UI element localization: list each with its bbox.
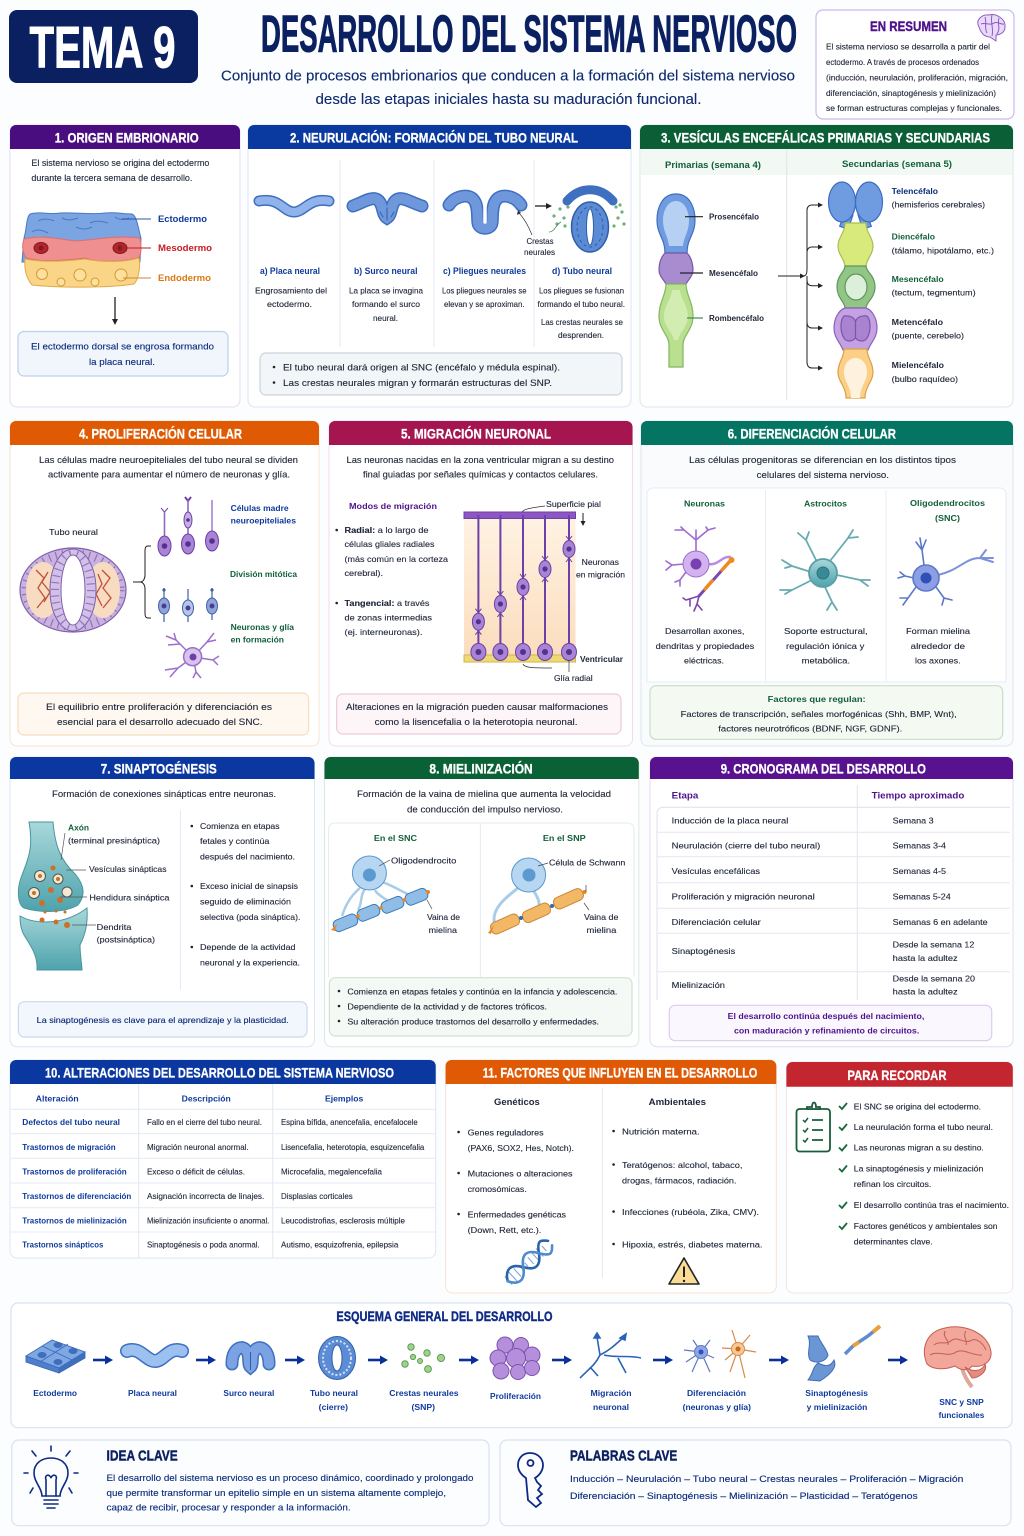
- panel 1: origen embrionario: [10, 125, 240, 407]
- panel 6: diferenciación celular: Las células progenitoras se diferencian en los distintos tipos: [689, 455, 957, 465]
- panel 10: alteraciones: Migración neuronal anormal.: [147, 1143, 249, 1152]
- callout: placa neural: la placa neural.: [89, 357, 155, 367]
- callout: factores que regulan: Factores que regulan:: [768, 695, 866, 704]
- panel 11: factores: Hipoxia, estrés, diabetes materna.: [622, 1240, 762, 1250]
- panel 5: migración neuronal: Radial: a lo largo de: [344, 526, 429, 535]
- diagram: placa neural: [259, 200, 329, 212]
- callout: factores que regulan: Factores de transcripción, señales morfogénicas (Shh, BMP, Wnt),: [681, 710, 957, 719]
- panel 2: neurulación: Las crestas neurales se: [541, 318, 624, 327]
- panel 6: diferenciación celular: celulares del sistema nervioso.: [757, 470, 889, 480]
- icon: bombilla: [24, 1446, 78, 1508]
- panel 4: proliferación celular: 4. PROLIFERACIÓN CELULAR: [79, 424, 242, 442]
- panel: esquema general: (SNP): [412, 1403, 435, 1412]
- panel 8: mielinización: mielina: [429, 926, 458, 935]
- icon: cerebro: [924, 1327, 991, 1387]
- panel 11: factores: [446, 1060, 776, 1293]
- panel 8: mielinización: Célula de Schwann: [549, 858, 625, 868]
- panel: en resumen: [816, 10, 1014, 119]
- panel 11: factores: Genéticos: [494, 1097, 540, 1107]
- icon: tubo neural: [318, 1336, 356, 1380]
- panel 9: cronograma: 9. CRONOGRAMA DEL DESARROLLO: [721, 760, 926, 776]
- subtitle: Conjunto de procesos embrionarios que conducen a la formación del sistema nervioso: [221, 68, 795, 84]
- panel 4: proliferación celular: Tubo neural: [49, 528, 98, 537]
- diagram: tubo neural: [549, 190, 626, 252]
- panel 11: factores: Infecciones (rubéola, Zika, CMV).: [622, 1208, 759, 1217]
- panel 10: alteraciones: Defectos del tubo neural: [22, 1118, 120, 1127]
- panel: esquema general: Diferenciación: [687, 1389, 746, 1398]
- panel: idea clave: capaz de recibir, procesar y responder a la información.: [106, 1502, 351, 1512]
- panel: para recordar: Las neuronas migran a su destino.: [854, 1144, 984, 1152]
- table: cronograma: hasta la adultez: [893, 988, 958, 996]
- panel 3: vesículas encefálicas: Secundarias (semana 5): [842, 159, 952, 169]
- panel 7: sinaptogénesis: Comienza en etapas: [200, 822, 280, 831]
- icon: brain outline: [978, 15, 1005, 41]
- panel 6: diferenciación celular: Soporte estructural,: [784, 627, 868, 636]
- panel: esquema general: [11, 1303, 1012, 1428]
- panel 3: vesículas encefálicas: [640, 125, 1013, 407]
- diagram: oligodendrocito: [331, 856, 432, 933]
- panel 5: migración neuronal: Neuronas: [582, 558, 619, 567]
- panel 11: factores: drogas, fármacos, radiación.: [622, 1176, 736, 1186]
- panel: esquema general: Surco neural: [223, 1389, 274, 1398]
- panel: esquema general: (cierre): [319, 1403, 348, 1412]
- panel: idea clave: El desarrollo del sistema nervioso es un proceso dinámico, coordinado y prolongado: [106, 1473, 474, 1483]
- panel: en resumen: se forman estructuras complejas y funcionales.: [826, 104, 1002, 113]
- panel 6: diferenciación celular: Forman mielina: [906, 627, 971, 636]
- panel 8: mielinización: En el SNC: [374, 834, 417, 843]
- diagram: sinapsis: [18, 822, 96, 970]
- icon: crestas neurales: [402, 1344, 445, 1372]
- panel 8: mielinización: Vaina de: [584, 913, 619, 922]
- panel: esquema general: Placa neural: [128, 1389, 177, 1398]
- callout: desarrollo continúa: con maduración y refinamiento de circuitos.: [734, 1026, 919, 1036]
- callout: equilibrio: [18, 693, 309, 735]
- panel 2: neurulación: ectodermo.: [267, 300, 312, 309]
- panel 6: diferenciación celular: 6. DIFERENCIACIÓN CELULAR: [728, 424, 896, 442]
- panel: para recordar: El SNC se origina del ectodermo.: [854, 1102, 981, 1112]
- panel: palabras clave: [500, 1440, 1011, 1526]
- panel 2: neurulación: Engrosamiento del: [255, 286, 327, 296]
- panel: para recordar: [786, 1062, 1013, 1293]
- banner: TEMA 9: [9, 10, 198, 83]
- panel 2: neurulación: Los pliegues neurales se: [442, 286, 527, 296]
- panel 8: mielinización: Oligodendrocito: [391, 856, 457, 866]
- panel: para recordar: Factores genéticos y ambientales son: [854, 1222, 998, 1231]
- icon: placa neural: [127, 1350, 182, 1361]
- panel 5: migración neuronal: (más común en la corteza: [344, 555, 449, 564]
- table: cronograma: Semanas 5-24: [893, 892, 951, 902]
- banner: TEMA 9: TEMA 9: [30, 16, 176, 80]
- subtitle: desde las etapas iniciales hasta su maduración funcional.: [316, 92, 702, 108]
- panel 1: origen embrionario: Mesodermo: [158, 243, 213, 253]
- panel 11: factores: 11. FACTORES QUE INFLUYEN EN EL DESARROLLO: [483, 1064, 757, 1080]
- panel 2: neurulación: formando el tubo neural.: [538, 300, 625, 309]
- panel: idea clave: IDEA CLAVE: [106, 1448, 178, 1464]
- panel 10: alteraciones: Leucodistrofias, esclerosis múltiple: [281, 1216, 406, 1226]
- table: cronograma: Desde la semana 12: [893, 940, 975, 950]
- diagram: célula de Schwann: [488, 858, 589, 936]
- panel 3: vesículas encefálicas: (tálamo, hipotálamo, etc.): [892, 246, 994, 256]
- panel 9: cronograma: Tiempo aproximado: [872, 790, 965, 800]
- panel: palabras clave: PALABRAS CLAVE: [570, 1448, 677, 1464]
- panel 6: diferenciación celular: (SNC): [935, 514, 960, 523]
- panel 4: proliferación celular: División mitótica: [230, 570, 298, 579]
- callout: aprendizaje: [18, 1002, 307, 1037]
- panel: esquema general: SNC y SNP: [939, 1398, 984, 1407]
- panel 10: alteraciones: Trastornos de proliferación: [22, 1168, 127, 1176]
- panel: para recordar: PARA RECORDAR: [847, 1067, 946, 1083]
- panel: esquema general: Proliferación: [490, 1392, 541, 1401]
- panel 10: alteraciones: Sinaptogénesis o poda anormal.: [147, 1240, 260, 1250]
- table: cronograma: hasta la adultez: [893, 954, 958, 963]
- panel 6: diferenciación celular: Astrocitos: [804, 500, 848, 508]
- arrow: to tube: [535, 203, 552, 209]
- panel: idea clave: [12, 1440, 489, 1526]
- panel 10: alteraciones: Exceso o déficit de células.: [147, 1168, 245, 1176]
- icon: diferenciación: [684, 1330, 756, 1378]
- panel 2: neurulación: elevan y se aproximan.: [444, 300, 524, 309]
- table: cronograma: Mielinización: [672, 981, 725, 990]
- table: cronograma: Diferenciación celular: [672, 918, 761, 927]
- panel 2: neurulación: d) Tubo neural: [552, 266, 612, 276]
- panel 6: diferenciación celular: [641, 421, 1013, 746]
- icon: división mitótica: [158, 588, 218, 622]
- panel 11: factores: (PAX6, SOX2, Hes, Notch).: [468, 1144, 574, 1153]
- panel 5: migración neuronal: cerebral).: [344, 569, 383, 578]
- table: cronograma: Neurulación (cierre del tubo neural): [672, 842, 821, 850]
- label: crestas neurales: neurales: [524, 248, 555, 257]
- panel 11: factores: (Down, Rett, etc.).: [468, 1226, 541, 1235]
- panel: para recordar: refinan los circuitos.: [854, 1180, 931, 1189]
- panel 7: sinaptogénesis: Depende de la actividad: [200, 943, 296, 952]
- panel 2: neurulación: La placa se invagina: [349, 286, 424, 296]
- panel 10: alteraciones: Espina bífida, anencefalia, encefalocele: [281, 1118, 418, 1127]
- panel 3: vesículas encefálicas: (tectum, tegmentum): [892, 288, 976, 298]
- panel 4: proliferación celular: en formación: [231, 636, 284, 644]
- panel 2: neurulación: desprenden.: [558, 331, 604, 340]
- panel 5: migración neuronal: 5. MIGRACIÓN NEURONAL: [401, 424, 551, 442]
- arrow: down: [112, 297, 118, 325]
- panel 8: mielinización: Vaina de: [427, 913, 461, 922]
- panel: esquema general: Crestas neurales: [389, 1389, 459, 1398]
- panel 7: sinaptogénesis: (terminal presináptica): [68, 836, 160, 846]
- panel 1: origen embrionario: Ectodermo: [158, 214, 208, 224]
- panel 7: sinaptogénesis: Hendidura sináptica: [89, 894, 170, 902]
- panel 10: alteraciones: Fallo en el cierre del tubo neural.: [147, 1118, 262, 1127]
- panel 7: sinaptogénesis: Formación de conexiones sinápticas entre neuronas.: [52, 789, 276, 799]
- panel: para recordar: determinantes clave.: [854, 1238, 933, 1246]
- table: cronograma: Proliferación y migración neuronal: [672, 892, 815, 902]
- panel 4: proliferación celular: Las células madre neuroepiteliales del tubo neural se dividen: [39, 455, 298, 465]
- icon: neurona: [666, 527, 734, 611]
- panel 10: alteraciones: Trastornos de migración: [22, 1143, 116, 1152]
- callout: placa neural: El ectodermo dorsal se engrosa formando: [31, 342, 214, 352]
- callout: aprendizaje: La sinaptogénesis es clave para el aprendizaje y la plasticidad.: [37, 1016, 289, 1025]
- panel 2: neurulación: c) Pliegues neurales: [443, 266, 526, 276]
- diagram: surco neural: [353, 199, 422, 220]
- icon: advertencia: [669, 1258, 699, 1284]
- panel 5: migración neuronal: Las neuronas nacidas en la zona ventricular migran a su destino: [346, 455, 614, 465]
- panel 6: diferenciación celular: dendritas y propiedades: [656, 642, 754, 651]
- panel: en resumen: diferenciación, sinaptogénesis y mielinización): [826, 89, 996, 98]
- callout: alteraciones migración: [337, 694, 621, 734]
- panel 7: sinaptogénesis: fetales y continúa: [200, 837, 270, 846]
- panel 10: alteraciones: [10, 1060, 436, 1258]
- icon: checklist: [796, 1102, 830, 1152]
- icon: proliferación: [490, 1337, 540, 1380]
- panel 11: factores: Enfermedades genéticas: [468, 1210, 566, 1220]
- diagram: radial glia: [464, 506, 586, 672]
- callout: desarrollo continúa: El desarrollo continúa después del nacimiento,: [728, 1012, 924, 1021]
- panel 10: alteraciones: Asignación incorrecta de linajes.: [147, 1192, 264, 1201]
- table: cronograma: Semanas 6 en adelante: [893, 918, 988, 927]
- panel 8: mielinización: [324, 757, 639, 1047]
- panel 5: migración neuronal: de zonas intermedias: [344, 614, 432, 622]
- panel 6: diferenciación celular: Oligodendrocitos: [910, 499, 986, 508]
- panel 5: migración neuronal: Superficie pial: [546, 500, 601, 509]
- panel 3: vesículas encefálicas: Mesencéfalo: [709, 269, 758, 278]
- callout: SNC y SNP: [260, 353, 622, 395]
- diagram: tubo neural en corte: [20, 548, 126, 632]
- panel 8: mielinización: En el SNP: [543, 834, 586, 843]
- table: cronograma: Semanas 4-5: [893, 867, 947, 876]
- panel 2: neurulación: b) Surco neural: [354, 266, 418, 276]
- panel 3: vesículas encefálicas: Prosencéfalo: [709, 212, 759, 222]
- panel: para recordar: El desarrollo continúa tras el nacimiento.: [854, 1201, 1009, 1210]
- panel: en resumen: (inducción, neurulación, proliferación, migración,: [826, 74, 1008, 82]
- panel 10: alteraciones: Descripción: [182, 1094, 231, 1104]
- panel: esquema general: Migración: [590, 1389, 632, 1398]
- panel 10: alteraciones: Ejemplos: [325, 1094, 364, 1104]
- panel 2: neurulación: a) Placa neural: [260, 266, 320, 276]
- panel 8: mielinización: mielina: [586, 926, 617, 935]
- panel 2: neurulación: formando el surco: [352, 300, 421, 309]
- table: cronograma: [657, 785, 1010, 1000]
- panel 10: alteraciones: Autismo, esquizofrenia, epilepsia: [281, 1240, 399, 1250]
- panel 11: factores: cromosómicas.: [468, 1185, 527, 1194]
- panel 8: mielinización: de conducción del impulso nervioso.: [407, 804, 563, 814]
- panel 7: sinaptogénesis: 7. SINAPTOGÉNESIS: [101, 760, 217, 776]
- icon: ectodermo: [26, 1340, 85, 1373]
- panel 3: vesículas encefálicas: Telencéfalo: [892, 187, 938, 196]
- panel 8: mielinización: 8. MIELINIZACIÓN: [429, 760, 533, 776]
- icon: astrocito: [780, 530, 870, 610]
- panel 7: sinaptogénesis: Axón: [68, 824, 89, 832]
- panel 10: alteraciones: Lisencefalia, heterotopia, esquizencefalia: [281, 1143, 425, 1152]
- icon: células madre: [158, 497, 218, 556]
- panel 3: vesículas encefálicas: (hemisferios cerebrales): [892, 200, 985, 210]
- icon: surco neural: [232, 1348, 269, 1370]
- callout: factores que regulan: [650, 686, 1003, 739]
- icon: migración: [580, 1333, 641, 1378]
- panel 10: alteraciones: Trastornos sinápticos: [22, 1240, 104, 1250]
- icon: ADN: [502, 1237, 556, 1287]
- panel 5: migración neuronal: células gliales radiales: [344, 540, 434, 549]
- panel 4: proliferación celular: activamente para aumentar el número de neuronas y glía.: [48, 470, 290, 480]
- panel 6: diferenciación celular: Desarrollan axones,: [665, 627, 744, 636]
- arrow: bracket to secondary vesicles: [778, 202, 823, 370]
- panel: para recordar: La sinaptogénesis y mielinización: [854, 1164, 983, 1174]
- panel 7: sinaptogénesis: [10, 757, 314, 1047]
- panel 3: vesículas encefálicas: Metencéfalo: [892, 318, 943, 327]
- panel 10: alteraciones: Mielinización insuficiente o anormal.: [147, 1216, 269, 1226]
- panel 5: migración neuronal: [329, 421, 632, 746]
- panel 5: migración neuronal: Glía radial: [554, 674, 593, 683]
- table: cronograma: Sinaptogénesis: [672, 947, 735, 956]
- panel 3: vesículas encefálicas: Rombencéfalo: [709, 314, 764, 323]
- panel 3: vesículas encefálicas: Mielencéfalo: [892, 361, 944, 370]
- panel 5: migración neuronal: Ventricular: [580, 655, 623, 664]
- panel: esquema general: y mielinización: [807, 1403, 868, 1412]
- icon: llave: [518, 1453, 543, 1507]
- panel 4: proliferación celular: Células madre: [231, 504, 289, 513]
- panel: esquema general: funcionales: [939, 1411, 985, 1420]
- panel 10: alteraciones: Trastornos de diferenciación: [22, 1192, 131, 1201]
- panel 11: factores: Genes reguladores: [468, 1128, 544, 1138]
- panel: esquema general: Sinaptogénesis: [805, 1389, 869, 1398]
- panel 6: diferenciación celular: los axones.: [915, 656, 961, 666]
- panel 1: origen embrionario: El sistema nervioso se origina del ectodermo: [31, 158, 209, 168]
- panel 6: diferenciación celular: regulación iónica y: [786, 642, 864, 651]
- diagram: primary vesicles: [657, 194, 703, 367]
- panel: esquema general: Tubo neural: [310, 1389, 358, 1398]
- panel 8: mielinización: Formación de la vaina de mielina que aumenta la velocidad: [357, 789, 611, 799]
- panel: para recordar: La neurulación forma el tubo neural.: [854, 1123, 993, 1132]
- panel 7: sinaptogénesis: Vesículas sinápticas: [89, 865, 166, 874]
- panel 10: alteraciones: Alteración: [36, 1094, 79, 1104]
- panel: en resumen: ectodermo. A través de procesos ordenados: [826, 58, 979, 67]
- table: cronograma: Desde la semana 20: [893, 974, 976, 984]
- callout: SNC y SNP: Las crestas neurales migran y formarán estructuras del SNP.: [283, 378, 552, 388]
- callout: SNC y SNP: El tubo neural dará origen al SNC (encéfalo y médula espinal).: [283, 362, 560, 372]
- panel 5: migración neuronal: final guiadas por señales químicas y contactos celulares.: [363, 470, 598, 480]
- panel 6: diferenciación celular: eléctricas.: [684, 656, 724, 666]
- panel: esquema general: (neuronas y glía): [683, 1403, 751, 1412]
- panel: idea clave: que permite transformar un epitelio simple en un sistema altamente complejo,: [106, 1488, 446, 1498]
- callout: mielinización: [329, 978, 632, 1036]
- callout: mielinización: Comienza en etapas fetales y continúa en la infancia y adolescencia.: [347, 988, 617, 996]
- panel: palabras clave: Diferenciación – Sinaptogénesis – Mielinización – Plasticidad – Teratógenos: [570, 1491, 918, 1501]
- panel 7: sinaptogénesis: Exceso inicial de sinapsis: [200, 882, 298, 891]
- panel 2: neurulación: [248, 125, 631, 407]
- panel: esquema general: Ectodermo: [33, 1389, 77, 1398]
- callout: desarrollo continúa: [669, 1005, 992, 1041]
- table: cronograma: Inducción de la placa neural: [672, 816, 789, 826]
- panel 11: factores: Mutaciones o alteraciones: [468, 1170, 573, 1178]
- panel 4: proliferación celular: [10, 421, 319, 746]
- panel 11: factores: Teratógenos: alcohol, tabaco,: [622, 1161, 742, 1170]
- panel 9: cronograma: [650, 757, 1013, 1047]
- germ layers illustration: [22, 213, 151, 287]
- icon: sinaptogénesis: [808, 1326, 880, 1381]
- panel 7: sinaptogénesis: neuronal y la experiencia.: [200, 958, 300, 968]
- panel 6: diferenciación celular: alrededor de: [911, 642, 966, 651]
- panel 10: alteraciones: Microcefalia, megalencefalia: [281, 1168, 383, 1176]
- diagram: secondary vesicles: [828, 182, 882, 398]
- panel 2: neurulación: 2. NEURULACIÓN: FORMACIÓN DEL TUBO NEURAL: [290, 128, 578, 146]
- panel 3: vesículas encefálicas: (bulbo raquídeo): [892, 375, 958, 384]
- panel 11: factores: Nutrición materna.: [622, 1128, 700, 1136]
- icon: neurona en formación: [165, 633, 219, 678]
- panel 1: origen embrionario: durante la tercera semana de desarrollo.: [31, 173, 192, 183]
- panel 10: alteraciones: 10. ALTERACIONES DEL DESARROLLO DEL SISTEMA NERVIOSO: [45, 1064, 394, 1080]
- panel 5: migración neuronal: Tangencial: a través: [344, 599, 430, 608]
- callout: equilibrio: El equilibrio entre proliferación y diferenciación es: [46, 702, 273, 712]
- panel 3: vesículas encefálicas: Diencéfalo: [892, 232, 935, 242]
- callout: alteraciones migración: Alteraciones en la migración pueden causar malformaciones: [346, 702, 609, 712]
- subtitle: [221, 68, 795, 108]
- panel 2: neurulación: neural.: [373, 314, 398, 323]
- panel 3: vesículas encefálicas: (puente, cerebelo): [892, 332, 964, 340]
- panel: en resumen: EN RESUMEN: [870, 18, 947, 34]
- panel 1: origen embrionario: 1. ORIGEN EMBRIONARIO: [55, 130, 199, 146]
- diagram: pliegues neurales: [449, 196, 521, 228]
- callout: factores que regulan: factores neurotróficos (BDNF, NGF, GDNF).: [718, 724, 902, 734]
- panel: en resumen: El sistema nervioso se desarrolla a partir del: [826, 42, 990, 52]
- label: crestas neurales: Crestas: [526, 237, 554, 246]
- panel 10: alteraciones: Trastornos de mielinización: [22, 1216, 127, 1226]
- panel 7: sinaptogénesis: selectiva (poda sináptica).: [200, 913, 300, 922]
- panel 7: sinaptogénesis: (postsináptica): [97, 936, 155, 944]
- panel: palabras clave: Inducción – Neurulación – Tubo neural – Crestas neurales – Proliferación – Migración: [570, 1474, 963, 1484]
- panel 7: sinaptogénesis: Dendrita: [97, 923, 132, 932]
- bracket: [133, 546, 151, 618]
- panel: esquema general: ESQUEMA GENERAL DEL DESARROLLO: [336, 1308, 553, 1324]
- icon: oligodendrocito: [898, 538, 993, 605]
- panel 3: vesículas encefálicas: Primarias (semana 4): [665, 160, 761, 170]
- panel 11: factores: Ambientales: [649, 1097, 706, 1107]
- panel 7: sinaptogénesis: después del nacimiento.: [200, 852, 295, 862]
- panel 4: proliferación celular: neuroepiteliales: [231, 516, 297, 526]
- table: cronograma: Semanas 3-4: [893, 842, 947, 850]
- panel 1: origen embrionario: Endodermo: [158, 273, 212, 283]
- panel 3: vesículas encefálicas: Mesencéfalo: [892, 275, 944, 284]
- label: crestas neurales: [517, 210, 555, 257]
- panel 6: diferenciación celular: metabólica.: [802, 656, 850, 666]
- callout: mielinización: Su alteración produce trastornos del desarrollo y enfermedades.: [347, 1018, 599, 1026]
- panel 7: sinaptogénesis: seguido de eliminación: [200, 898, 291, 906]
- table: cronograma: Vesículas encefálicas: [672, 867, 760, 876]
- panel 2: neurulación: Los pliegues se fusionan: [539, 286, 624, 296]
- panel 9: cronograma: Etapa: [672, 790, 699, 800]
- panel: esquema general: neuronal: [593, 1403, 629, 1412]
- panel 6: diferenciación celular: Neuronas: [684, 500, 726, 508]
- panel 5: migración neuronal: en migración: [576, 570, 625, 580]
- callout: mielinización: Dependiente de la actividad y de factores tróficos.: [347, 1002, 547, 1012]
- callout: alteraciones migración: como la lisencefalia o la heterotopia neuronal.: [375, 717, 578, 727]
- callout: placa neural: [18, 332, 228, 376]
- panel 5: migración neuronal: (ej. interneuronas).: [344, 628, 422, 637]
- table: cronograma: Semana 3: [893, 816, 934, 826]
- panel 5: migración neuronal: Modos de migración: [349, 502, 437, 511]
- panel 10: alteraciones: Displasias corticales: [281, 1192, 353, 1201]
- callout: equilibrio: esencial para el desarrollo adecuado del SNC.: [57, 717, 262, 727]
- panel 4: proliferación celular: Neuronas y glía: [231, 623, 295, 632]
